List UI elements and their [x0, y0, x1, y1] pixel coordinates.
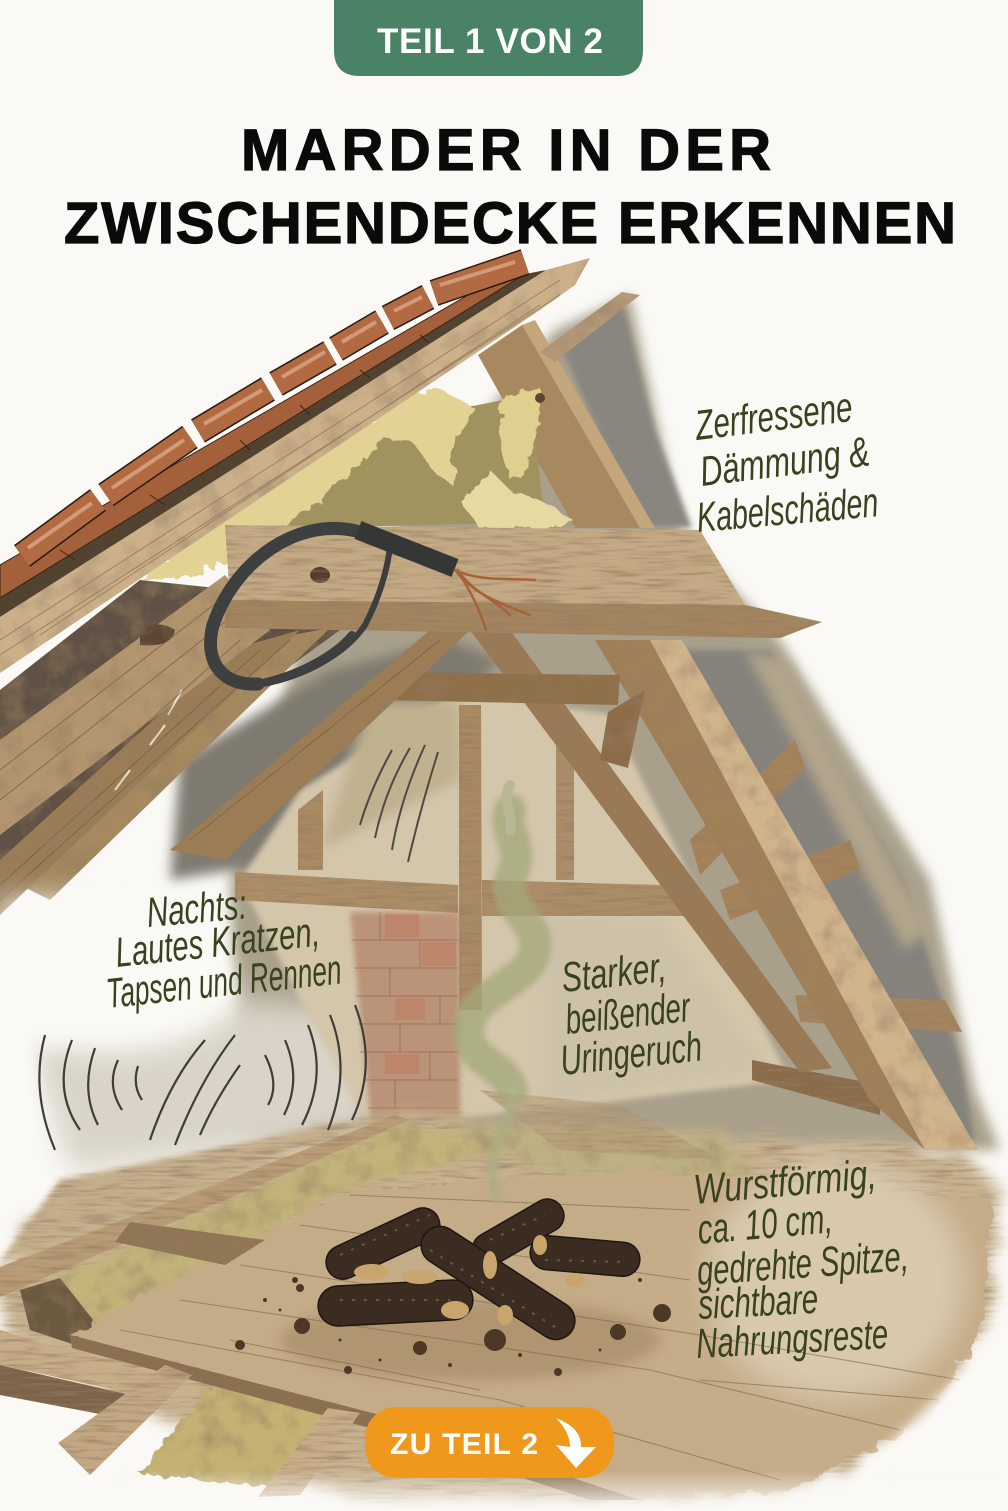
urine smell vapour — [468, 785, 535, 1200]
icon: curved down arrow — [556, 1418, 596, 1468]
title — [64, 118, 956, 256]
button: to part 2 — [365, 1407, 614, 1478]
label: droppings description: sichtbare — [697, 1275, 819, 1328]
attic interior wash — [30, 295, 1000, 1170]
title: MARDER IN DER — [241, 118, 771, 183]
label: urine smell: beißender — [563, 983, 694, 1043]
floor boards wash — [0, 1115, 1000, 1505]
label: urine smell: Uringeruch — [558, 1022, 704, 1084]
scratch marks on wall — [360, 745, 438, 862]
main floor plank — [70, 1160, 990, 1500]
gable wall — [240, 690, 790, 1130]
roof tile underlay — [0, 270, 546, 617]
label: droppings description — [692, 1150, 910, 1367]
wall timber frame — [235, 705, 962, 1115]
insulation torn — [140, 320, 655, 578]
label: droppings description: gedrehte Spitze, — [695, 1232, 910, 1294]
label: droppings description: Nahrungsreste — [695, 1310, 889, 1367]
label: night noises: Nachts: — [145, 880, 248, 936]
sound waves and scratches — [39, 1005, 366, 1150]
roof tiles — [0, 262, 525, 598]
tie beam — [225, 525, 822, 638]
label: droppings description: ca. 10 cm, — [696, 1194, 834, 1253]
label: night noises — [104, 880, 344, 1017]
title: ZWISCHENDECKE ERKENNEN — [64, 191, 956, 256]
left rafters — [0, 575, 470, 915]
roof rafter plank — [0, 258, 640, 673]
bottom fade — [0, 1470, 1008, 1511]
label: night noises: Tapsen und Rennen — [104, 946, 344, 1017]
label: insulation and cable damage — [692, 383, 880, 541]
tab: part indicator — [334, 0, 643, 76]
cable with exposed wires — [211, 528, 535, 686]
button: to part 2: ZU TEIL 2 — [390, 1428, 538, 1461]
label: night noises: Lautes Kratzen, — [113, 908, 322, 976]
label: insulation and cable damage: Zerfressene — [692, 383, 855, 449]
lower rafters — [378, 630, 978, 1150]
droppings pile — [235, 1193, 671, 1380]
tab: part indicator: TEIL 1 VON 2 — [377, 22, 603, 61]
label: urine smell — [558, 943, 704, 1084]
label: insulation and cable damage: Dämmung & — [697, 428, 872, 495]
white fades around painted edges — [0, 400, 1008, 1511]
label: droppings description: Wurstförmig, — [692, 1150, 878, 1213]
brick chimney — [350, 912, 770, 1130]
label: insulation and cable damage: Kabelschäden — [695, 478, 880, 541]
floor joists — [0, 1090, 720, 1497]
insulation between joists — [20, 1125, 760, 1490]
label: urine smell: Starker, — [559, 943, 668, 1001]
